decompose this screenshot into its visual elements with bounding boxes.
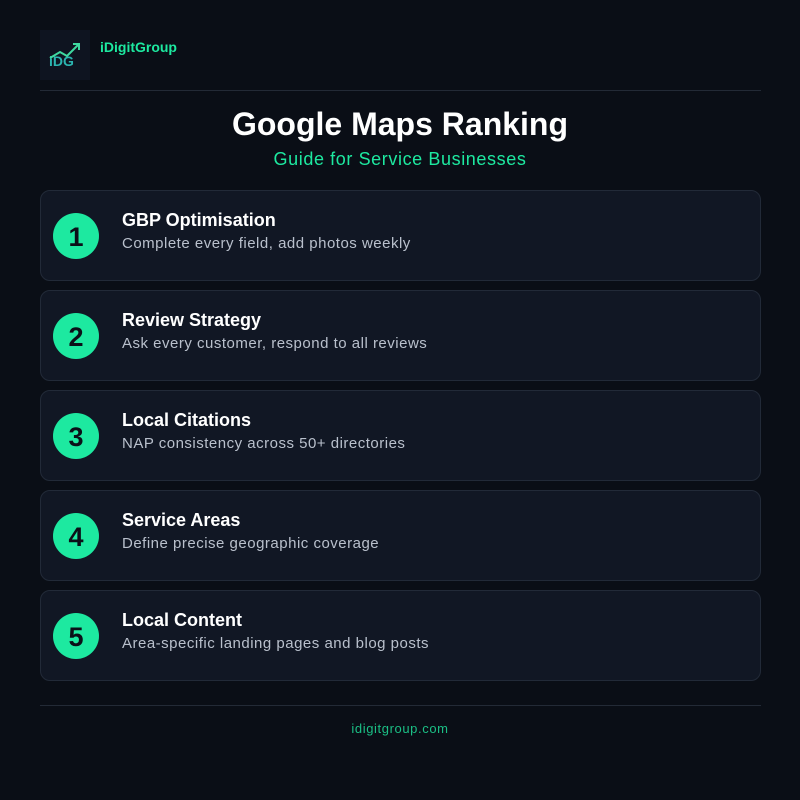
brand name: iDigitGroup — [100, 39, 177, 55]
card 5: Area-specific landing pages and blog posts — [122, 635, 429, 652]
card 1: GBP Optimisation — [122, 210, 276, 230]
card 2: Review Strategy — [122, 310, 261, 330]
card 4: Service Areas — [122, 510, 240, 530]
card 2 — [40, 290, 761, 381]
card 5: 5 — [68, 622, 84, 652]
card 5: Local Content — [122, 610, 242, 630]
card 3: 3 — [68, 422, 84, 452]
footer: idigitgroup.com — [351, 721, 449, 736]
card 1: Complete every field, add photos weekly — [122, 235, 411, 252]
card 4: 4 — [68, 522, 84, 552]
logo: iDG — [49, 53, 74, 69]
card 3: Local Citations — [122, 410, 251, 430]
card 3: NAP consistency across 50+ directories — [122, 435, 405, 452]
logo — [40, 30, 90, 80]
card 4: Define precise geographic coverage — [122, 535, 379, 552]
card 2: Ask every customer, respond to all reviews — [122, 335, 427, 352]
card 3 — [40, 390, 761, 481]
card 4 — [40, 490, 761, 581]
card 1: 1 — [68, 222, 84, 252]
card 2: 2 — [68, 322, 84, 352]
card 1 — [40, 190, 761, 281]
subtitle: Guide for Service Businesses — [274, 149, 526, 169]
card 5 — [40, 590, 761, 681]
title: Google Maps Ranking — [232, 106, 568, 142]
